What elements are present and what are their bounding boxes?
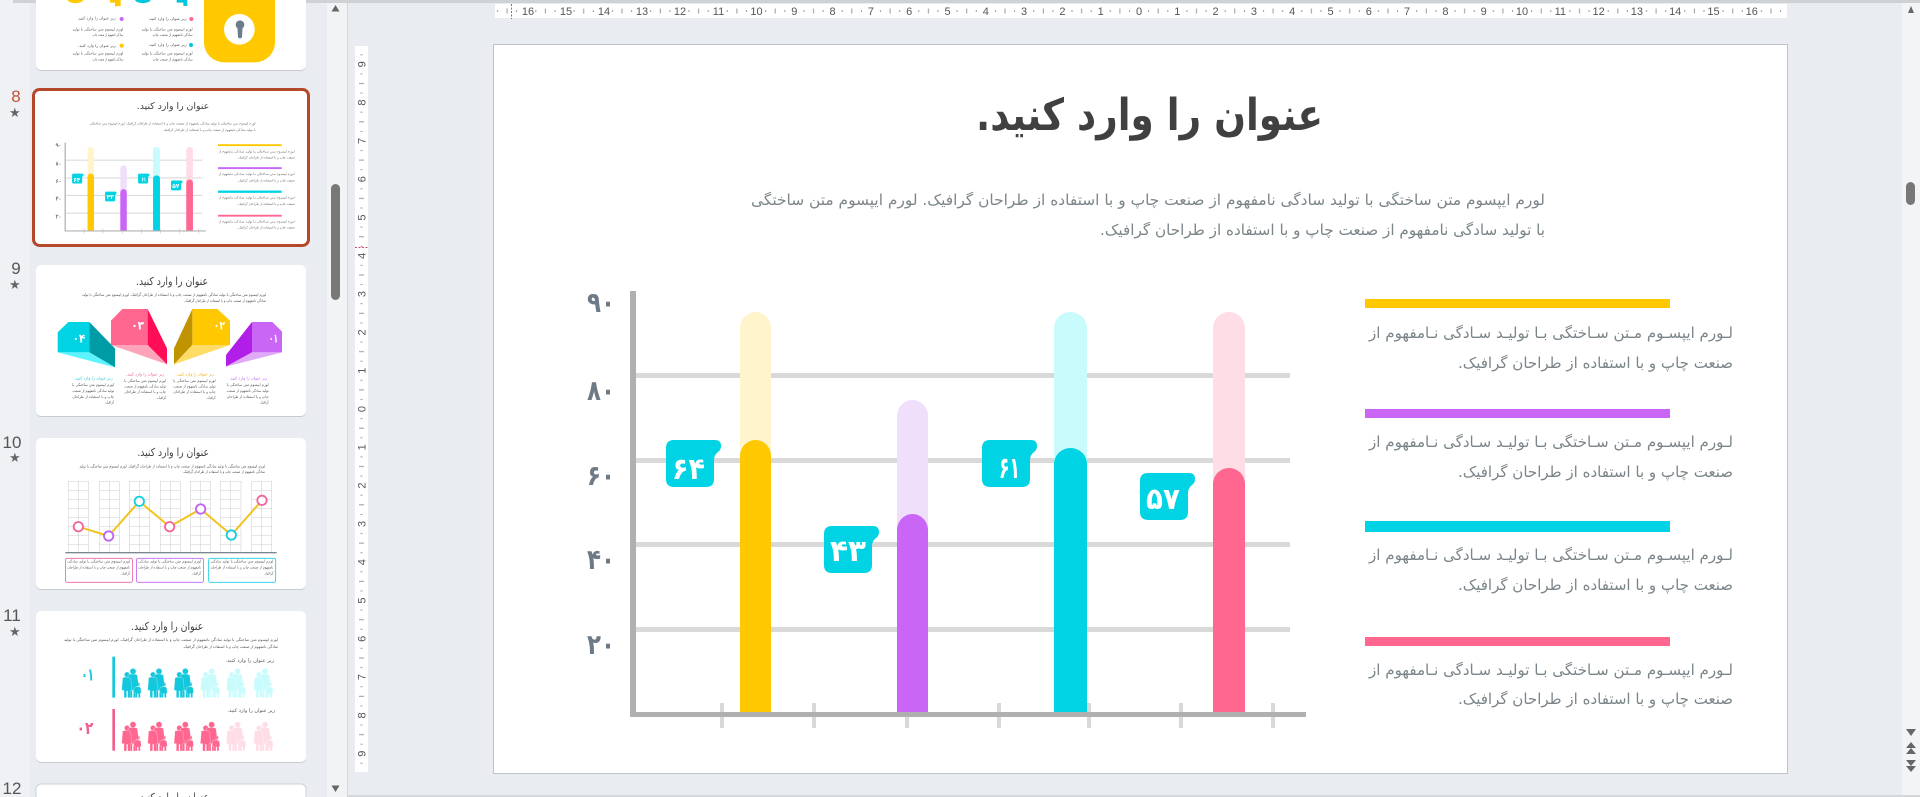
panel: selected thumbnail 8: صنعت چاپ و با استفاده از طراحان گرافیک. [237,178,295,182]
icon: star 8: ★ [9,106,21,121]
text boxes: نامفهوم از صنعت چاپ و با استفاده از طراحان [67,565,130,570]
horizontal ruler: 3 [1021,6,1027,18]
panel: thumbnail 11 [36,611,306,763]
horizontal ruler: 14 [1669,6,1681,18]
panel: selected thumbnail 8: عنوان را وارد کنید. [137,101,209,112]
panel: thumbnail 11: عنوان را وارد کنید. [131,620,203,633]
value chip: 43 [824,526,879,573]
horizontal ruler: 8 [1442,6,1448,18]
captions under blocks: تولید سادگی نامفهوم از صنعت [124,384,166,390]
horizontal ruler: 15 [560,6,572,18]
horizontal ruler: 5 [1327,6,1334,18]
y axis labels: ۹۰ [587,286,615,319]
captions under blocks: گرافیک. [105,400,114,405]
horizontal ruler: 2 [1059,6,1065,18]
panel: thumbnail 12 [36,784,306,797]
panel: thumbnail 7: سادگی نامفهوم از صنعت چاپ [153,56,193,62]
horizontal ruler: 11 [1555,6,1566,18]
captions under blocks: تولید سادگی نامفهوم از صنعت [173,384,216,390]
panel: selected thumbnail 8: ۶۰ [56,179,61,185]
text boxes: لورم ایپسوم متن ساختگی با تولید سادگی [67,558,130,564]
legend item: yellow: صنعت چاپ و با استفاده از طراحان گرافیک. [1458,354,1733,372]
captions under blocks: لورم ایپسوم متن ساختگی با [173,378,216,384]
horizontal ruler: 9 [791,6,797,18]
horizontal ruler: 5 [944,6,951,18]
shape: block 01: ۰۱ [269,332,278,346]
panel: selected thumbnail 8: لـورم ایپسـوم مـتن سـاختگی بـا تولیـد سـادگی نـامفهوم از [218,149,295,154]
vertical ruler [355,46,368,772]
panel: thumbnail 7: لورم ایپسوم متن ساختگی با تولید [142,50,193,56]
panel: thumbnail 11: لورم ایپسوم متن ساختگی با تولید سادگی نامفهوم از صنعت چاپ و با استفاده از طراحان گرافیک. لورم ایپسوم متن ساختگی با تولید [64,637,278,642]
horizontal ruler: 3 [1251,6,1257,18]
panel: selected thumbnail 8: لورم ایپسوم متن ساختگی با تولید سادگی نامفهوم از صنعت چاپ و با استفاده از طراحان گرافیک. لورم ایپسوم متن ساختگی [90,122,256,127]
label: slide number 8: 8 [11,87,21,106]
value chip: 64 [666,440,721,487]
intro text: با تولید سادگی نامفهوم از صنعت چاپ و با استفاده از طراحان گرافیک. [1100,221,1545,239]
horizontal ruler: 1 [1098,6,1104,18]
shape: block 03 [111,309,167,364]
shape: block 02: ۰۲ [214,318,226,332]
value chip: 57 [1140,473,1195,520]
text boxes: گرافیک. [264,570,274,575]
captions under blocks [72,371,269,405]
panel: thumbnail 10: لورم ایپسوم متن ساختگی با تولید سادگی نامفهوم از صنعت چاپ و با استفاده از طراحان گرافیک. لورم ایپسوم متن ساختگی با تولید [79,463,265,468]
captions under blocks: لورم ایپسوم متن ساختگی با [124,378,166,384]
panel: selected thumbnail 8: لـورم ایپسـوم مـتن سـاختگی بـا تولیـد سـادگی نـامفهوم از [218,172,295,177]
panel: thumbnail 7: زیر عنوان را وارد کنید. [77,15,116,20]
text boxes: نامفهوم از صنعت چاپ و با استفاده از طراحان [138,565,201,570]
panel: thumbnail 7: زیر عنوان را وارد کنید. [148,42,187,47]
panel: thumbnail 10 [36,438,306,590]
vertical ruler: 3 [356,521,368,527]
title: عنوان را وارد کنید. [976,90,1323,141]
panel: selected thumbnail 8: با تولید سادگی نامفهوم از صنعت چاپ و با استفاده از طراحان گرافیک. [163,128,256,133]
legend item: purple [1365,409,1733,481]
horizontal ruler: 2 [1213,6,1219,18]
panel: thumbnail 7: سادگی نامفهوم از صنعت چاپ [93,32,123,38]
vertical ruler: 4 [356,559,368,565]
horizontal ruler: 10 [1516,6,1528,18]
value chip: 57: ۵۷ [1146,482,1180,517]
legend item: cyan: لـورم ایپسـوم مـتن سـاختگی بـا تولیـد سـادگی نـامفهوم از [1368,546,1733,565]
horizontal ruler: 15 [1707,6,1720,18]
icon: star 10: ★ [9,451,21,466]
horizontal ruler: 12 [1592,6,1605,18]
captions under blocks: تولید سادگی نامفهوم از صنعت [227,388,269,394]
bar chart [587,286,1306,728]
vertical ruler: 5 [356,597,368,604]
vertical ruler: 3 [356,291,368,297]
panel: thumbnail 11: ۰۱ [81,666,94,686]
panel: selected thumbnail 8: ۲۰ [56,214,61,220]
value chip: 43: ۴۳ [830,534,866,569]
line chart [74,496,267,541]
legend item: yellow [1365,299,1733,372]
y axis labels: ۶۰ [587,459,615,492]
legend item: cyan [1365,521,1733,594]
vertical ruler: 1 [356,444,368,450]
vertical ruler: 6 [356,176,368,182]
horizontal ruler: 13 [636,6,648,18]
panel: selected thumbnail 8: ۹۰ [56,143,61,149]
panel: selected thumbnail 8: صنعت چاپ و با استفاده از طراحان گرافیک. [237,202,295,206]
shape: block 03: ۰۳ [131,318,145,332]
intro text [751,191,1545,239]
bar: pink 57 [1213,312,1245,713]
vertical ruler: 9 [356,61,368,67]
axes [630,291,1306,717]
horizontal ruler: 7 [1404,6,1410,18]
panel: selected thumbnail 8: لـورم ایپسـوم مـتن سـاختگی بـا تولیـد سـادگی نـامفهوم از [218,220,295,225]
horizontal ruler: 11 [713,6,724,18]
vertical ruler: 5 [356,214,368,221]
captions under blocks: چاپ و با استفاده از طراحان [72,395,114,399]
panel: thumbnail 7: زیر عنوان را وارد کنید. [148,16,187,21]
horizontal ruler: 14 [598,6,610,18]
captions under blocks: زیر عنوان را وارد کنید. [229,375,267,380]
panel: thumbnail 11: سادگی نامفهوم از صنعت چاپ و با استفاده از طراحان گرافیک. [183,644,278,649]
icons: family row 1 [122,668,273,698]
panel: thumbnail 9: لورم ایپسوم متن ساختگی با تولید سادگی نامفهوم از صنعت چاپ و با استفاده از طراحان گرافیک. لورم ایپسوم متن ساختگی با تولید [82,292,266,297]
horizontal ruler: 6 [1366,6,1372,18]
panel: thumbnail 9 [36,265,306,417]
panel: thumbnail 7: لورم ایپسوم متن ساختگی با تولید [142,27,193,33]
horizontal ruler: 8 [830,6,836,18]
captions under blocks: چاپ و با استفاده از طراحان [124,390,166,394]
panel: selected thumbnail 8: ۵۷ [172,183,180,190]
legend item: purple: صنعت چاپ و با استفاده از طراحان گرافیک. [1458,463,1733,481]
label: slide number 10: 10 [3,433,21,452]
horizontal ruler: 10 [750,6,763,18]
label: slide number 11: 11 [3,606,21,625]
horizontal ruler: 16 [522,6,534,18]
horizontal ruler: 12 [674,6,686,18]
horizontal ruler [495,4,1787,19]
legend item: pink: صنعت چاپ و با استفاده از طراحان گرافیک. [1458,690,1733,708]
horizontal ruler: 4 [1289,6,1295,18]
icon: star 11: ★ [9,625,21,640]
vertical ruler: 2 [356,329,368,335]
panel: thumbnail 11: زیر عنوان را وارد کنید. [226,658,275,664]
intro text: لورم ایپسوم متن ساختگی با تولید سادگی نامفهوم از صنعت چاپ و با استفاده از طراحان گرافیک. لورم ایپسوم متن ساختگی [751,191,1545,210]
icon: star 9: ★ [9,278,21,293]
bar: yellow 64 [740,312,771,713]
vertical ruler: 0 [356,406,368,412]
horizontal ruler: 4 [983,6,989,18]
shape: block 04: ۰۴ [73,332,85,346]
text boxes: لورم ایپسوم متن ساختگی با تولید سادگی [211,558,273,564]
panel: selected thumbnail 8: ۴۰ [56,197,61,203]
panel: selected thumbnail 8: ۶۱ [142,177,146,184]
panel: thumbnail 7: لورم ایپسوم متن ساختگی با تولید [73,27,123,33]
captions under blocks: گرافیک. [259,400,269,405]
captions under blocks: چاپ و با استفاده از طراحان [173,390,216,394]
y axis labels: ۴۰ [587,543,615,576]
y axis labels [587,286,615,661]
panel: thumbnail 7: سادگی نامفهوم از صنعت چاپ [93,56,123,62]
captions under blocks: زیر عنوان را وارد کنید. [126,371,164,376]
text boxes [65,558,276,582]
grid columns [68,481,272,552]
vertical ruler: 2 [356,483,368,489]
vertical ruler: 7 [356,674,368,680]
vertical ruler: 1 [356,368,368,374]
shape: block 04 [58,322,115,367]
value chip: 61 [982,440,1037,487]
panel: thumbnail 10: سادگی نامفهوم از صنعت چاپ و با استفاده از طراحان گرافیک. [183,469,265,474]
legend item: cyan: صنعت چاپ و با استفاده از طراحان گرافیک. [1458,576,1733,594]
y axis labels: ۲۰ [587,628,615,661]
bar: cyan 61 [1054,312,1087,713]
horizontal ruler: 13 [1631,6,1643,18]
shape: block 01 [226,322,282,367]
vertical ruler: 4 [356,253,368,259]
panel: thumbnail 9: سادگی نامفهوم از صنعت چاپ و با استفاده از طراحان گرافیک. [184,298,267,303]
panel: thumbnail 7: زیر عنوان را وارد کنید. [78,43,116,48]
scrollbar: slide editor [1906,6,1916,772]
panel: thumbnail 9: عنوان را وارد کنید. [136,275,208,288]
panel: thumbnail 10: عنوان را وارد کنید. [137,446,209,459]
legend item: pink [1365,637,1733,708]
legend item: purple: لـورم ایپسـوم مـتن سـاختگی بـا تولیـد سـادگی نـامفهوم از [1368,433,1733,452]
panel: thumbnail 7: سادگی نامفهوم از صنعت چاپ [153,32,193,38]
shape: block 02 [174,309,230,364]
panel: selected thumbnail 8 [34,90,308,246]
panel: selected thumbnail 8: ۴۳ [106,194,114,201]
horizontal ruler: 6 [906,6,912,18]
panel: thumbnail 11: ۰۲ [77,719,94,739]
panel: thumbnail 7 [36,0,306,71]
horizontal ruler: 16 [1746,6,1758,18]
icons: family row 2 [122,722,273,751]
vertical ruler: 9 [356,751,368,757]
panel: selected thumbnail 8: لـورم ایپسـوم مـتن سـاختگی بـا تولیـد سـادگی نـامفهوم از [218,196,295,201]
panel: selected thumbnail 8: صنعت چاپ و با استفاده از طراحان گرافیک. [237,226,295,230]
value chip: 64: ۶۴ [672,452,705,487]
captions under blocks: زیر عنوان را وارد کنید. [176,371,214,376]
panel: thumbnail 11: زیر عنوان را وارد کنید. [227,708,276,714]
vertical ruler: 8 [356,100,368,106]
panel: main slide [494,44,1788,774]
horizontal ruler: 7 [868,6,874,18]
panel: thumbnail 7: لورم ایپسوم متن ساختگی با تولید [73,50,123,56]
bar: purple 43 [897,400,928,713]
text boxes: گرافیک. [192,570,201,575]
captions under blocks: زیر عنوان را وارد کنید. [74,375,113,380]
legend item: pink: لـورم ایپسـوم مـتن سـاختگی بـا تولیـد سـادگی نـامفهوم از [1368,661,1733,680]
captions under blocks: لورم ایپسوم متن ساختگی با [72,382,114,388]
legend item: yellow: لـورم ایپسـوم مـتن سـاختگی بـا تولیـد سـادگی نـامفهوم از [1368,324,1733,343]
panel: selected thumbnail 8: ۸۰ [56,161,61,167]
value chip: 61: ۶۱ [999,451,1020,486]
y axis labels: ۸۰ [587,374,615,407]
captions under blocks: گرافیک. [157,395,166,400]
captions under blocks: چاپ و با استفاده از طراحان [227,395,269,399]
horizontal ruler: 1 [1174,6,1180,18]
captions under blocks: تولید سادگی نامفهوم از صنعت [72,388,114,394]
vertical ruler: 6 [356,636,368,642]
captions under blocks: لورم ایپسوم متن ساختگی با [227,382,269,388]
text boxes: گرافیک. [121,570,130,575]
vertical ruler: 7 [356,138,368,144]
text boxes: لورم ایپسوم متن ساختگی با تولید سادگی [138,558,201,564]
horizontal ruler: 0 [1136,6,1142,18]
vertical ruler: 8 [356,712,368,718]
panel: selected thumbnail 8: ۶۴ [73,177,80,184]
horizontal ruler: 9 [1481,6,1487,18]
label: slide number 9: 9 [11,259,21,278]
panel: selected thumbnail 8: صنعت چاپ و با استفاده از طراحان گرافیک. [237,156,295,160]
captions under blocks: گرافیک. [206,395,216,400]
text boxes: نامفهوم از صنعت چاپ و با استفاده از طراحان [211,565,273,570]
scrollbar: thumbnails [331,5,340,792]
